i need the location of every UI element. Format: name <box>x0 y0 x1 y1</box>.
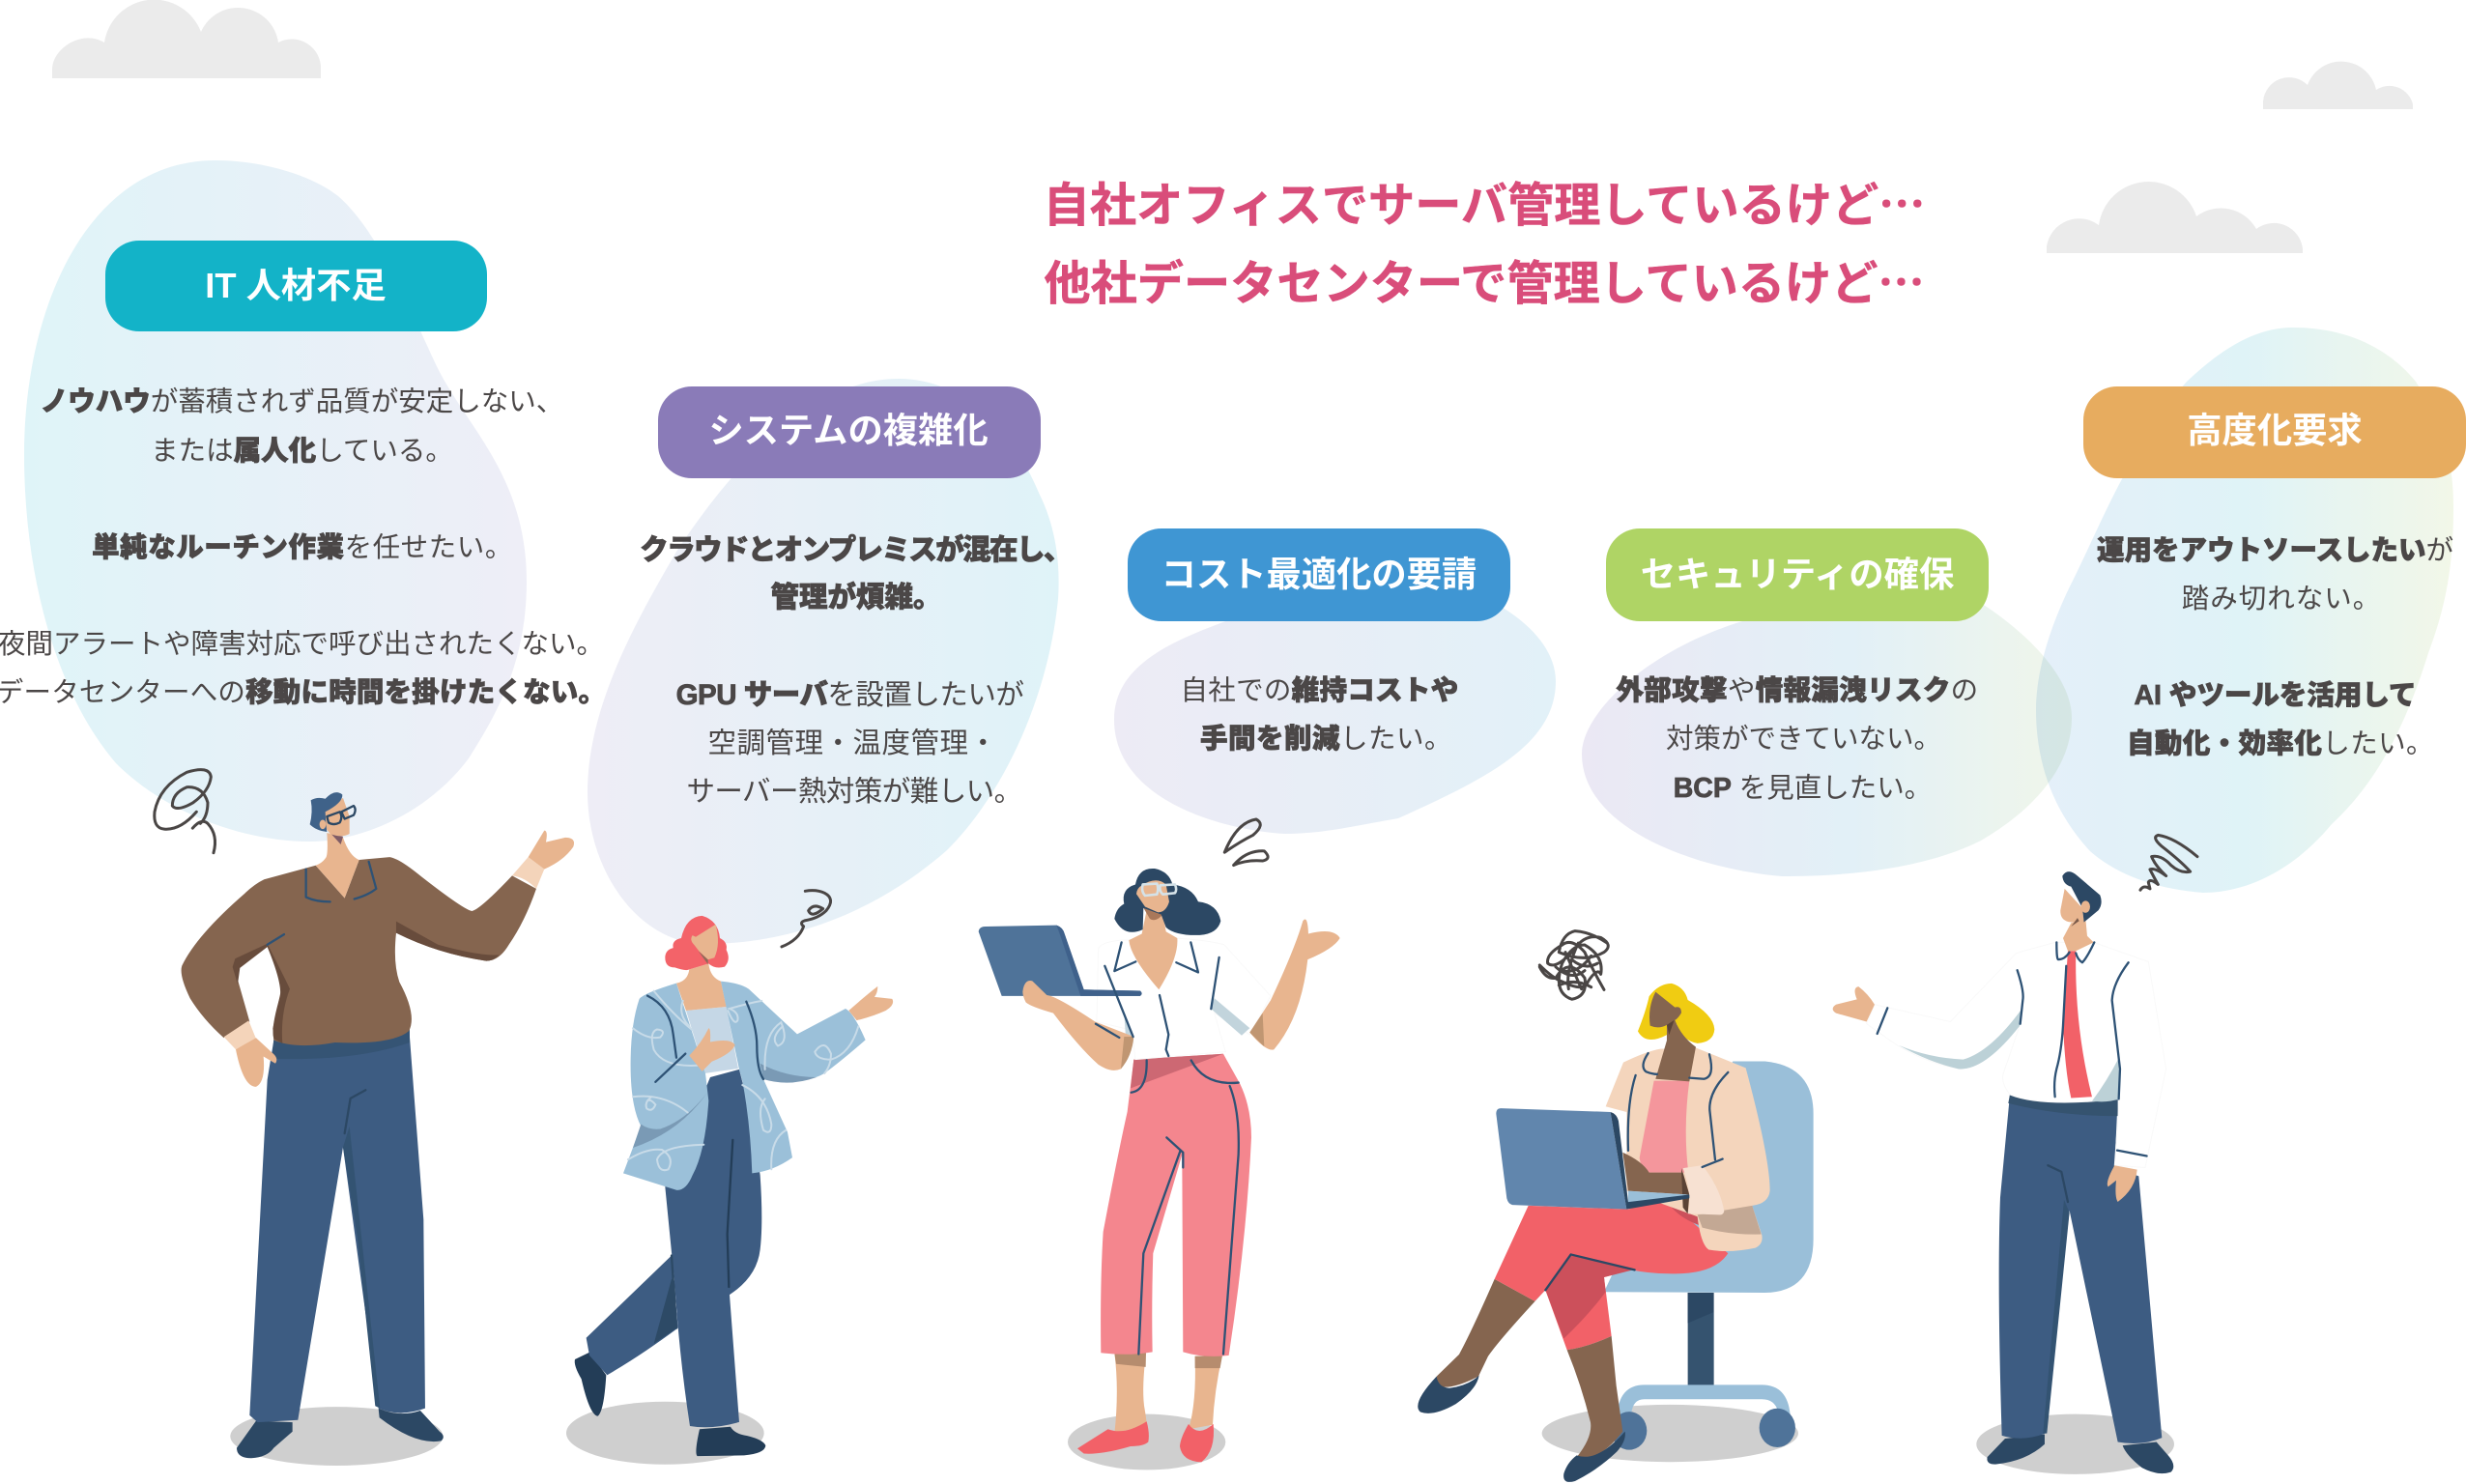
heading pill: advanced requirements <box>2083 386 2466 478</box>
heading pill: IT talent shortage: IT 人材不足 <box>205 266 387 305</box>
cloud: top left <box>52 0 321 78</box>
text block: security: 外部攻撃や情報漏洩リスクの <box>1616 675 1979 706</box>
blob: IT talent <box>24 160 527 842</box>
blob: system complexity <box>588 379 1059 944</box>
text block: IT talent shortage: データセンターへの移動に時間を掛けたくない。 <box>0 677 606 708</box>
text block: system complexity: 空調管理・温度管理・ <box>707 728 998 759</box>
heading pill: system complexity <box>658 386 1041 478</box>
blob: cost <box>1114 580 1556 834</box>
heading pill: cost optimisation: コスト最適化の要請 <box>1161 555 1477 594</box>
title: 他社データセンターで管理しているけど… <box>1044 245 1925 313</box>
figure: woman with laptop in pink trousers <box>979 819 1340 1470</box>
heading pill: cost optimisation <box>1128 528 1510 621</box>
figure: woman in blue jacket <box>566 891 893 1465</box>
text block: system complexity: 管理が煩雑。 <box>770 581 942 614</box>
text block: security <box>1616 675 1979 804</box>
icon: scribble curl <box>782 891 831 947</box>
text block: cost optimisation: 手間を削減したい。 <box>1200 724 1452 755</box>
text block: advanced requirements: 運用をアウトソースしたいが <box>2097 535 2453 566</box>
icon: scribble zigzag <box>2140 835 2197 890</box>
text block: IT talent shortage: または属人化している。 <box>151 436 453 467</box>
heading pill: security <box>1606 528 1989 621</box>
text block: IT talent shortage <box>0 386 606 708</box>
panel: security <box>1606 528 1989 804</box>
text block: advanced requirements: 踏み切れない。 <box>2182 584 2381 614</box>
figure: man in white shirt and red tie <box>1833 835 2197 1474</box>
text block: cost optimisation <box>1180 675 1459 755</box>
text block: cost optimisation: 自社での維持コストや <box>1180 675 1459 706</box>
blob: security <box>1582 580 2072 876</box>
text block: IT talent shortage: 単純なルーチン作業を任せたい。 <box>92 532 513 563</box>
title: 自社オフィスでサーバ管理しているけど… <box>1044 167 1925 235</box>
text block: advanced requirements: 自動化・効率化したい。 <box>2127 728 2434 759</box>
text block: system complexity: クラウドとオンプレミスが混在し、 <box>640 533 1071 566</box>
panel: cost optimisation <box>1128 528 1510 755</box>
icon: scribble tangle <box>1539 931 1608 999</box>
text block: security: BCP を見直したい。 <box>1674 773 1932 804</box>
panel: IT talent shortage <box>0 241 606 708</box>
panel: advanced requirements <box>2083 386 2466 759</box>
icon: scribble drops <box>1224 819 1268 865</box>
cloud: top right small <box>2263 62 2413 109</box>
text block: advanced requirements: AI やツールを活用して <box>2134 680 2417 711</box>
text block: IT talent shortage: ノウハウが蓄積されず品質が安定しない、 <box>41 386 563 417</box>
text block: system complexity: サーバー熱対策が難しい。 <box>686 776 1022 808</box>
heading pill: security: セキュリティの確保 <box>1641 555 1954 594</box>
heading pill: IT talent shortage <box>105 241 487 331</box>
cloud: right large <box>2047 182 2303 253</box>
icon: scribble swirl <box>155 770 215 853</box>
text block: system complexity: GPU サーバを設置したいが <box>676 679 1023 711</box>
heading pill: system complexity: システムの複雑化 <box>708 411 989 450</box>
text block: IT talent shortage: 夜間アラートや障害対応で呼び出されたくない。 <box>0 629 604 660</box>
text block: advanced requirements <box>2097 535 2453 759</box>
panel: system complexity <box>640 386 1071 808</box>
blob: advanced needs <box>2036 328 2453 893</box>
figure: seated woman on chair with laptop <box>1418 931 1814 1482</box>
title <box>1044 167 1925 313</box>
text block: security: 対策ができていない。 <box>1666 724 1941 755</box>
text block: system complexity <box>640 533 1071 808</box>
figure: man in brown sweater <box>155 770 574 1466</box>
heading pill: advanced requirements: 高度化要求 <box>2187 411 2363 450</box>
